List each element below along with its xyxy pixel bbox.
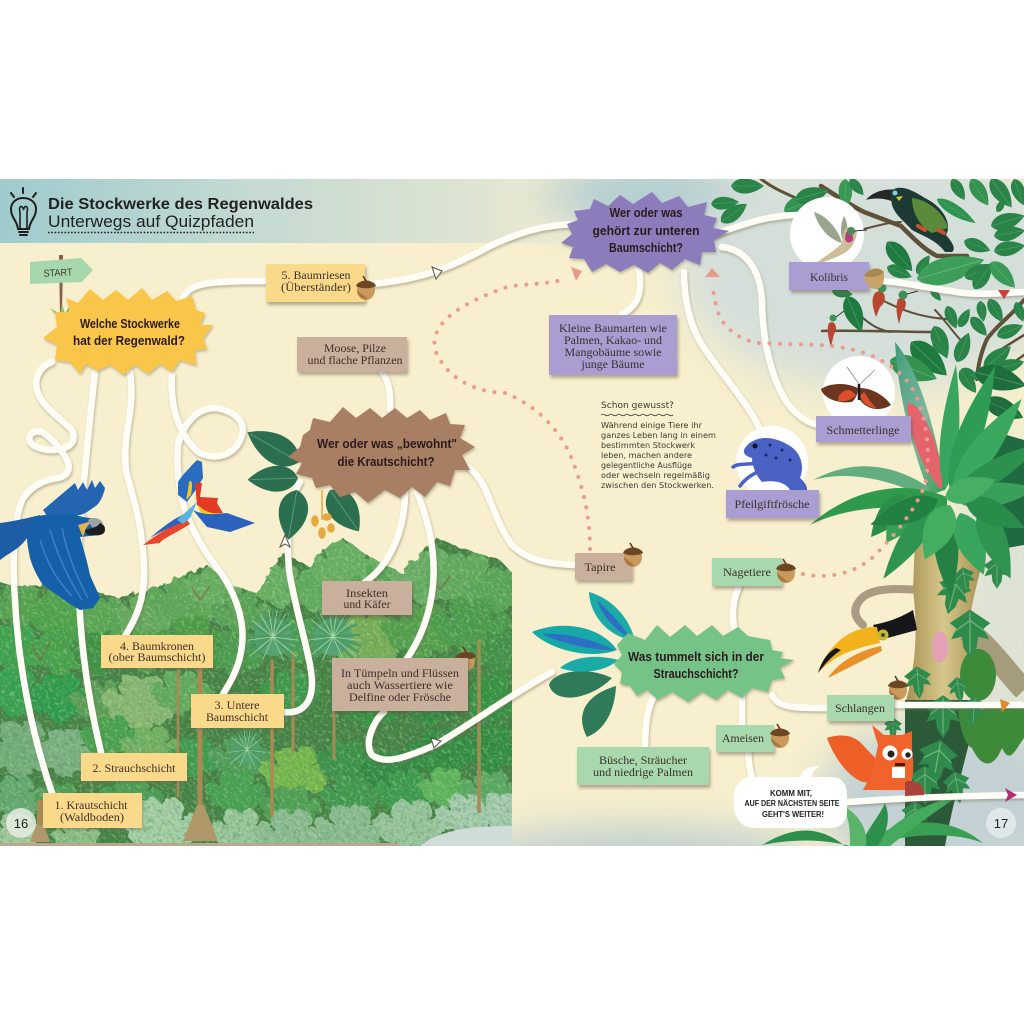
label: Krautschicht: (Waldboden) [60, 812, 124, 824]
fact box: Schon gewusst: leben, machen andere [601, 451, 692, 460]
label: Strauchschicht [81, 753, 187, 781]
label: Krautschicht [43, 793, 142, 828]
label: Tapire [575, 553, 632, 580]
dotted paths [434, 280, 928, 576]
label: Krautschicht: 1. Krautschicht [54, 800, 128, 812]
label: Kleine Baumarten: junge Bäume [580, 359, 644, 371]
quiz path network [14, 215, 1024, 802]
speech bubble: KOMM MIT, [770, 789, 812, 798]
label: Tümpeln: Delfine oder Frösche [349, 692, 451, 704]
bromeliad plant [810, 342, 1024, 597]
foliage texture [0, 530, 512, 846]
background spread [0, 179, 1024, 846]
acorn [776, 559, 796, 583]
label: Büsche [577, 747, 709, 785]
acorn [888, 676, 908, 700]
page number 16 [6, 808, 36, 838]
label: Baumkronen: (ober Baumschicht) [108, 652, 206, 664]
direction arrows [280, 267, 442, 748]
label: Nagetiere [712, 558, 782, 586]
burst question: untere Baumschicht: Wer oder was [610, 205, 682, 220]
acorn hidden [456, 647, 476, 671]
label: Insekten: Insekten [346, 588, 388, 600]
dark foliage behind plant [990, 430, 1024, 550]
label: Schmetterlinge [816, 416, 911, 442]
dotted path arrow heads [571, 267, 720, 281]
label: Baumkronen [101, 635, 213, 668]
palms [228, 610, 360, 766]
speech bubble [734, 766, 847, 828]
burst question: untere Baumschicht: Baumschicht? [609, 240, 683, 255]
label: Insekten: und Käfer [344, 599, 391, 611]
start sign: START [43, 267, 73, 280]
speech bubble: AUF DER NÄCHSTEN SEITE [744, 799, 840, 808]
circle: poison frog [733, 426, 808, 498]
label: Strauchschicht: 2. Strauchschicht [92, 763, 176, 775]
blue macaw [0, 480, 105, 610]
label: Büsche: und niedrige Palmen [593, 767, 693, 779]
fact box: Schon gewusst: bestimmten Stockwerk [601, 441, 696, 450]
acorn [864, 268, 884, 289]
circle: hummingbird [790, 197, 867, 271]
subheading: Unterwegs auf Quizpfaden [48, 213, 254, 231]
right-hand foliage and tree [711, 174, 1024, 846]
bottom plant [762, 795, 983, 846]
circle: butterfly [821, 356, 895, 428]
label: Tümpeln [332, 658, 468, 711]
label: 5. Baumriesen [266, 264, 365, 302]
label: Pfeilgiftfrösche [726, 490, 819, 518]
fact box: Schon gewusst: zwischen den Stockwerken. [601, 481, 714, 490]
label: Schlangen: Schlangen [835, 703, 885, 715]
label: Untere Baumschicht: Baumschicht [206, 712, 269, 724]
toucan [818, 610, 917, 678]
label: Tümpeln: auch Wassertiere wie [347, 680, 453, 692]
fact box: Schon gewusst: gelegentliche Ausflüge [601, 461, 692, 470]
teal leaves by green burst [532, 592, 635, 737]
leaves by brown burst [240, 420, 371, 542]
burst question: Strauchschicht: Was tummelt sich in der [628, 649, 764, 664]
label: Baumkronen: 4. Baumkronen [120, 641, 194, 653]
page number 17: 17 [994, 816, 1008, 831]
tree canopy blobs [0, 538, 531, 863]
upper tree leaves [711, 174, 1024, 427]
fact box: Schon gewusst [601, 401, 716, 490]
label: Kleine Baumarten: Mangobäume sowie [564, 347, 662, 359]
squirrel [827, 725, 924, 796]
moss [958, 704, 1024, 763]
label: 5. Baumriesen: (Überständer) [281, 280, 351, 294]
burst question: Strauchschicht: Strauchschicht? [654, 666, 739, 681]
heading: Die Stockwerke des Regenwaldes [48, 196, 313, 213]
label: Schlangen [827, 695, 894, 721]
acorn [770, 724, 790, 748]
burst question: untere Baumschicht: gehört zur unteren [592, 223, 700, 238]
icon: light bulb [11, 188, 36, 235]
title block [11, 188, 313, 235]
speech bubble: GEHT'S WEITER! [762, 810, 824, 819]
label: Kleine Baumarten: Kleine Baumarten wie [559, 323, 667, 335]
label: Untere Baumschicht: 3. Untere [214, 700, 260, 712]
label: Moose: und flache Pflanzen [308, 355, 403, 367]
label: Ameisen: Ameisen [722, 733, 764, 745]
burst question: Welche Stockwerke: hat der Regenwald? [73, 333, 185, 348]
label: Kolibris: Kolibris [810, 272, 849, 284]
burst question: Krautschicht [288, 407, 475, 503]
branches [761, 179, 1024, 379]
fact box: Schon gewusst: Schon gewusst? [601, 401, 674, 411]
tree trunks [32, 576, 479, 842]
page number 17 [986, 808, 1016, 838]
fact box: Schon gewusst: ganzes Leben lang in einem [601, 431, 716, 440]
burst question: Welche Stockwerke: Welche Stockwerke [80, 316, 180, 331]
label: Moose [297, 337, 407, 372]
label: Insekten [322, 581, 412, 615]
label: Kolibris [789, 262, 869, 290]
start sign [30, 255, 93, 320]
scarlet macaw [143, 460, 255, 545]
path end markers [998, 290, 1017, 802]
forest illustration [0, 538, 512, 846]
fact box: Schon gewusst: oder wechseln regelmäßig [601, 471, 710, 480]
label: Kleine Baumarten [549, 315, 677, 375]
label: Schmetterlinge: Schmetterlinge [826, 425, 900, 437]
vine loop [855, 589, 917, 625]
page number 16: 16 [14, 816, 28, 831]
pink flower bud [932, 631, 948, 663]
label: Untere Baumschicht [191, 694, 284, 728]
label: Moose: Moose, Pilze [324, 343, 386, 355]
label: Tapire: Tapire [584, 562, 616, 574]
label: 5. Baumriesen: 5. Baumriesen [282, 270, 351, 282]
burst question: Welche Stockwerke [43, 288, 213, 375]
burst question: Krautschicht: die Krautschicht? [338, 454, 435, 469]
small red-bellied birds on branch [828, 284, 918, 347]
acorn [623, 543, 643, 567]
label: Ameisen [716, 725, 774, 752]
label: Nagetiere: Nagetiere [723, 567, 771, 579]
ivy on trunk [884, 556, 1010, 834]
aracari bird [866, 188, 954, 252]
label: Büsche: Büsche, Sträucher [599, 755, 687, 767]
burst question: Krautschicht: Wer oder was „bewohnt" [317, 436, 457, 451]
burst question: untere Baumschicht [561, 192, 729, 273]
label: Tümpeln: In Tümpeln und Flüssen [341, 668, 459, 680]
tree trunk [906, 542, 980, 700]
label: Kleine Baumarten: Palmen, Kakao- und [564, 335, 662, 347]
burst question: Strauchschicht [614, 625, 794, 702]
acorn [356, 276, 376, 300]
label: Pfeilgiftfrösche: Pfeilgiftfrösche [734, 499, 810, 511]
fact box: Schon gewusst: Während einige Tiere ihr [601, 421, 703, 430]
